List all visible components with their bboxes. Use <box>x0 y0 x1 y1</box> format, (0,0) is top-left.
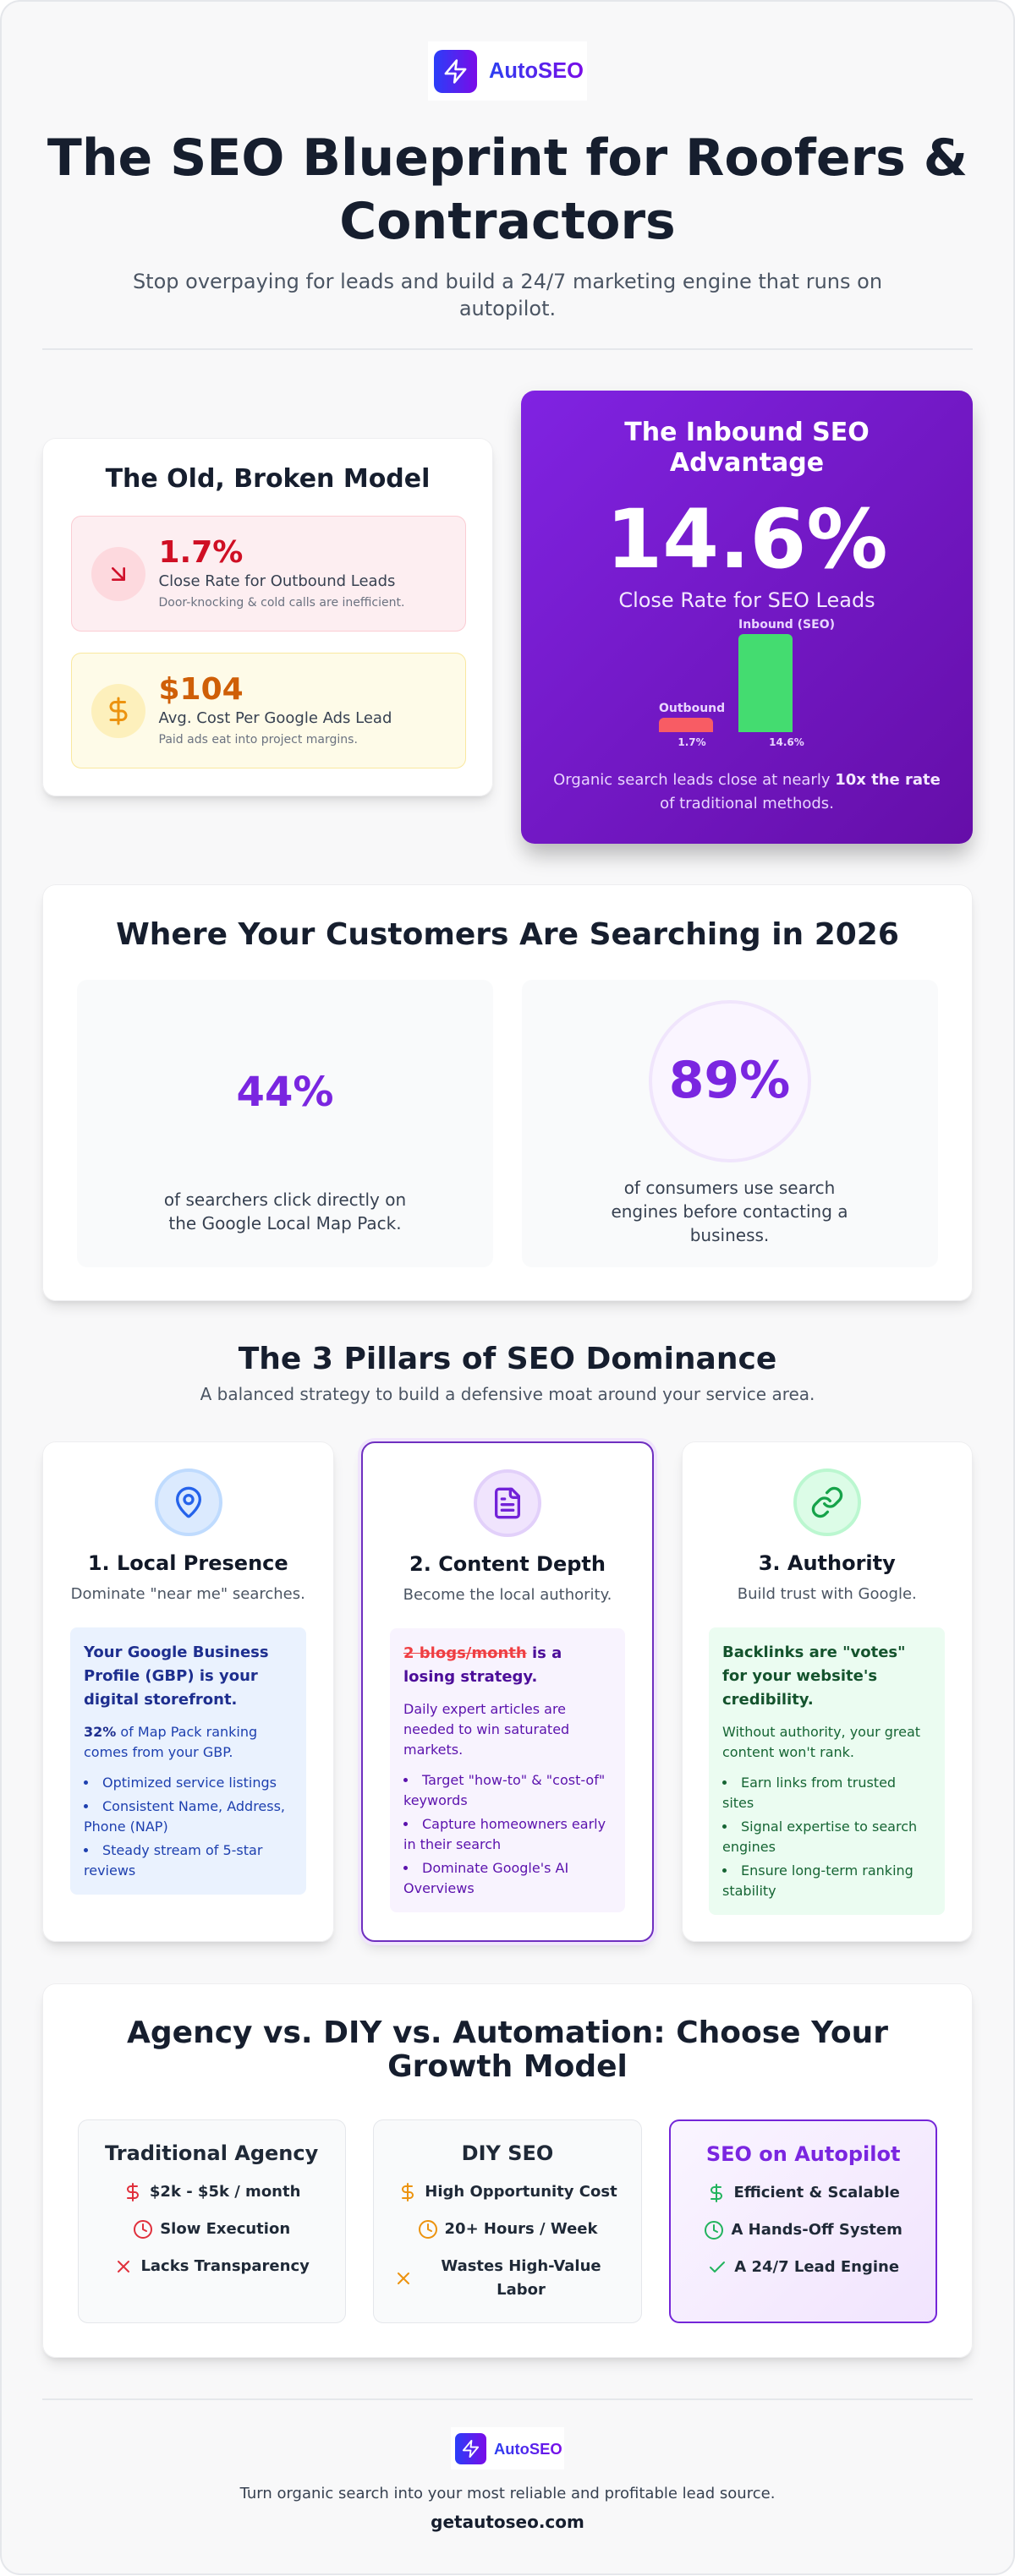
subheading: pillars: A balanced strategy to build a defensive moat around your service area. <box>200 1384 815 1404</box>
detail list: Consistent Name, Address, Phone (NAP) <box>84 1798 285 1835</box>
caption <box>553 771 941 812</box>
caption: Organic search leads close at nearly 10x the rate <box>553 771 941 789</box>
logo: AutoSEO footer <box>451 2427 564 2469</box>
heading: comparison: Growth Model <box>387 2049 628 2084</box>
logo wordmark: AutoSEO <box>489 59 584 83</box>
panel: pillar 1 local presence <box>42 1441 333 1942</box>
stat value: 89% <box>669 1051 790 1110</box>
row: cost: High Opportunity Cost <box>425 2183 617 2200</box>
row: labor: Wastes High-Value <box>441 2257 601 2274</box>
bar: outbound <box>659 718 713 732</box>
stat label: Close Rate for Outbound Leads <box>159 572 395 590</box>
subtitle: Stop overpaying for leads and build a 24/7 marketing engine that runs on <box>133 270 882 293</box>
footer tagline: Turn organic search into your most reliable and profitable lead source. <box>240 2485 775 2502</box>
detail heading: Your Google Business Profile (GBP) is your digital storefront. <box>84 1643 269 1709</box>
stat description: of consumers use search <box>624 1178 835 1198</box>
pillar subtitle: Become the local authority. <box>403 1586 612 1603</box>
title: Contractors <box>339 192 676 251</box>
icon: map pin <box>154 1468 222 1535</box>
stat card: 89% <box>521 980 937 1267</box>
heading: searching: Where Your Customers Are Searching in 2026 <box>116 917 899 952</box>
column title: SEO on Autopilot <box>706 2142 900 2166</box>
detail text: 32% of Map Pack ranking comes from your GBP. <box>84 1724 257 1760</box>
detail list: Steady stream of 5-star reviews <box>84 1842 262 1879</box>
subtitle <box>133 270 882 320</box>
stat note: Door-knocking & cold calls are inefficient. <box>159 596 404 610</box>
title <box>47 129 968 251</box>
pillar title: 2. Content Depth <box>409 1552 606 1576</box>
stat value: 44% <box>237 1069 333 1116</box>
detail text: Daily expert articles are needed to win saturated markets. <box>403 1701 569 1758</box>
row: price: $2k - $5k / month <box>150 2183 300 2200</box>
stat description: of searchers click directly on <box>164 1190 406 1210</box>
detail list <box>403 1772 606 1896</box>
value: outbound: 1.7% <box>678 736 706 748</box>
stat label: Close Rate for SEO Leads <box>618 588 875 612</box>
panel: pillar 3 authority <box>682 1441 973 1942</box>
column title: DIY SEO <box>462 2141 553 2165</box>
row: speed: Slow Execution <box>160 2220 290 2237</box>
stat description: the Google Local Map Pack. <box>168 1213 402 1233</box>
column: DIY SEO <box>373 2119 642 2323</box>
detail heading: 2 blogs/month is a losing strategy. <box>403 1644 562 1686</box>
row: efficient: Efficient & Scalable <box>733 2183 900 2201</box>
stat description <box>164 1190 406 1233</box>
heading: inbound advantage <box>624 418 870 477</box>
bar: inbound <box>738 634 793 732</box>
stat label: Avg. Cost Per Google Ads Lead <box>159 709 392 727</box>
heading: 3 pillars: The 3 Pillars of SEO Dominance <box>239 1342 776 1376</box>
row: hours: 20+ Hours / Week <box>445 2220 597 2237</box>
stat value: $104 <box>159 672 244 707</box>
detail text: Without authority, your great content won't rank. <box>722 1724 920 1760</box>
detail list: Signal expertise to search engines <box>722 1819 917 1855</box>
icon: dollar sign <box>91 684 145 738</box>
caption: of traditional methods. <box>660 795 834 812</box>
panel: the old, broken model <box>42 438 493 796</box>
detail box: GBP <box>70 1627 306 1895</box>
title: The SEO Blueprint for Roofers & <box>47 129 968 188</box>
subtitle: autopilot. <box>459 297 556 320</box>
icon: chain link <box>793 1468 861 1535</box>
detail list <box>722 1775 917 1899</box>
detail box: content <box>390 1628 625 1912</box>
detail list: Target "how-to" & "cost-of" keywords <box>403 1772 605 1808</box>
big stat: 14.6%: 14.6% <box>606 492 888 587</box>
detail list <box>84 1775 285 1879</box>
row: labor <box>398 2257 601 2298</box>
heading: old model: The Old, Broken Model <box>106 464 430 494</box>
detail list: Dominate Google's AI Overviews <box>403 1860 568 1896</box>
panel: growth model comparison <box>42 1983 973 2358</box>
logo wordmark: AutoSEO <box>494 2440 562 2458</box>
stat description <box>611 1178 848 1245</box>
row: transparency: Lacks Transparency <box>140 2257 310 2274</box>
panel: where customers are searching <box>42 884 973 1301</box>
row: lead engine: A 24/7 Lead Engine <box>734 2257 899 2276</box>
stat description: engines before contacting a <box>611 1201 848 1222</box>
stat card: 44% <box>77 980 493 1267</box>
label: outbound: Outbound <box>659 702 725 715</box>
stat card: $104 cost per lead <box>71 653 465 768</box>
panel: pillar 2 content depth <box>361 1441 654 1942</box>
column: traditional agency <box>78 2119 346 2323</box>
footer url: getautoseo.com <box>431 2512 584 2532</box>
heading: comparison <box>127 2015 888 2084</box>
stat card: 1.7% close rate <box>71 516 465 632</box>
heading: inbound advantage: Advantage <box>670 448 824 477</box>
icon: document <box>474 1469 541 1537</box>
pillar subtitle: Dominate "near me" searches. <box>71 1584 305 1603</box>
logo: AutoSEO header <box>428 41 587 101</box>
column title: Traditional Agency <box>105 2141 318 2165</box>
pillar title: 1. Local Presence <box>88 1551 288 1574</box>
detail list: Capture homeowners early in their search <box>403 1816 606 1852</box>
detail list: Earn links from trusted sites <box>722 1775 896 1811</box>
icon: lightning bolt mark <box>455 2433 486 2464</box>
heading: comparison: Agency vs. DIY vs. Automation: Choose Your <box>127 2015 888 2050</box>
heading: inbound advantage: The Inbound SEO <box>624 418 870 446</box>
column: SEO on autopilot <box>669 2119 937 2323</box>
stat note: Paid ads eat into project margins. <box>159 733 358 747</box>
pillar title: 3. Authority <box>759 1551 896 1574</box>
icon: arrow down right <box>91 547 145 601</box>
bar chart: outbound vs inbound <box>659 618 835 748</box>
label: inbound: Inbound (SEO) <box>738 618 835 632</box>
detail heading: Backlinks are "votes" for your website's credibility. <box>722 1643 905 1709</box>
row: labor: Labor <box>497 2281 546 2298</box>
stat value: 1.7% <box>159 535 243 570</box>
stat description: business. <box>690 1225 769 1245</box>
row: hands-off: A Hands-Off System <box>731 2220 903 2239</box>
detail list: Ensure long-term ranking stability <box>722 1862 914 1899</box>
pillar subtitle: Build trust with Google. <box>738 1584 917 1603</box>
panel: the inbound SEO advantage <box>521 391 973 844</box>
stat circle <box>648 1000 810 1162</box>
value: inbound: 14.6% <box>769 736 804 748</box>
icon: lightning bolt mark <box>434 50 477 93</box>
detail box: backlinks <box>709 1627 945 1915</box>
detail list: Optimized service listings <box>102 1775 277 1791</box>
